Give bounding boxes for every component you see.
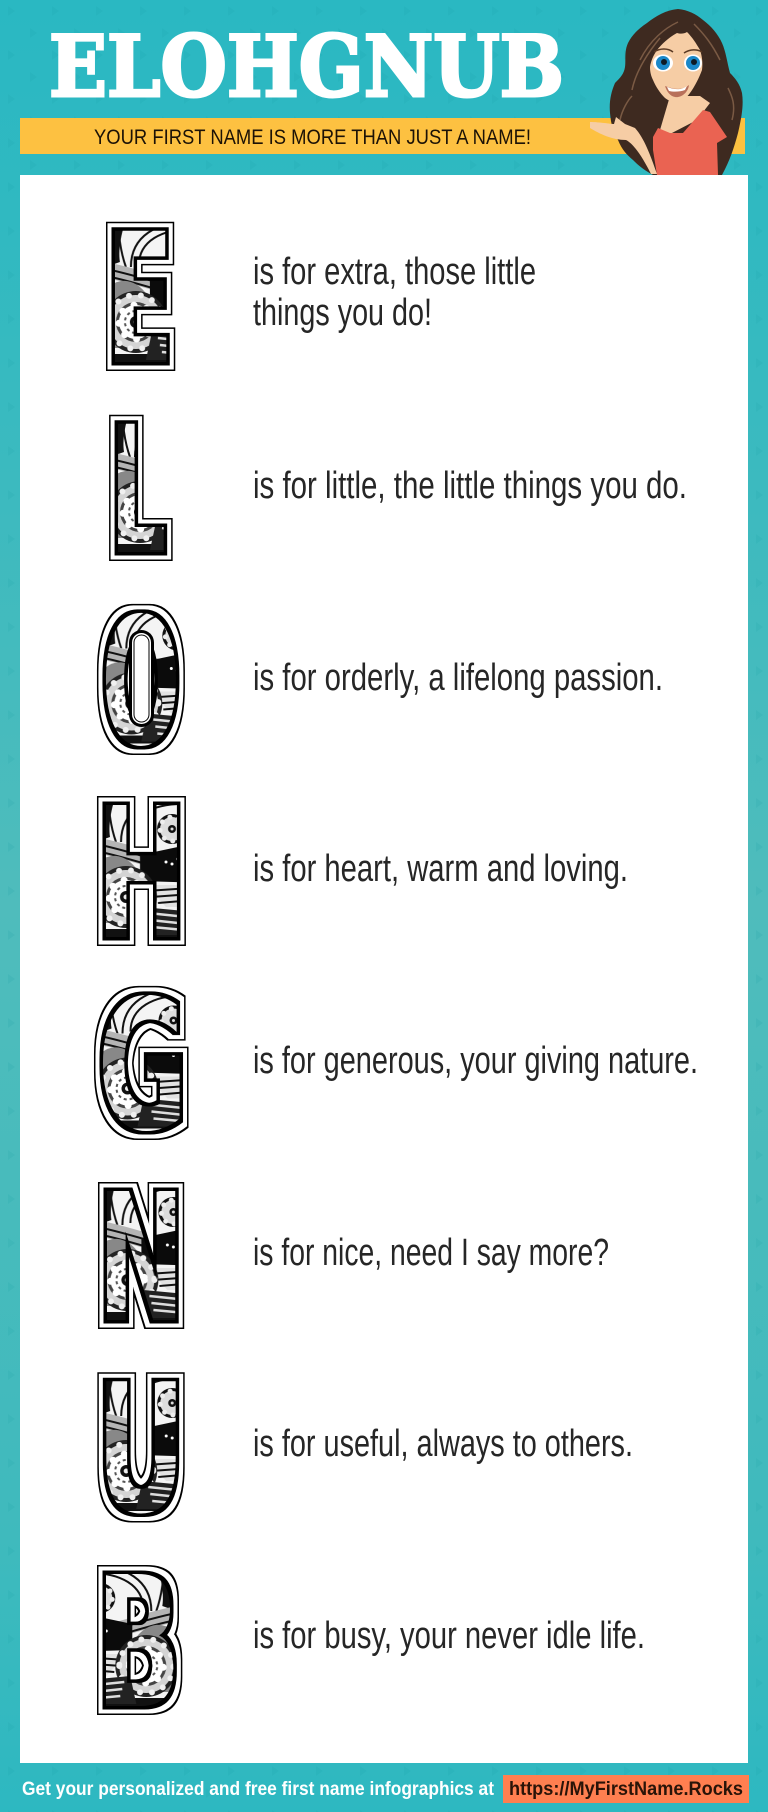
row G: letter: G: [98, 963, 188, 1172]
row B: letter: B: [96, 1538, 181, 1749]
row E: text: [253, 251, 536, 334]
subtitle: YOUR FIRST NAME IS MORE THAN JUST A NAME!: [94, 126, 531, 149]
eyes: [653, 49, 702, 72]
footer call to action: Get your personalized and free first name infographics at: [22, 1779, 495, 1800]
row H: text: is for heart, warm and loving.: [253, 848, 628, 890]
title: ELOHGNUB: [49, 17, 564, 116]
row O: letter: O: [101, 581, 181, 786]
hair: [610, 9, 743, 175]
row L: letter: L: [110, 389, 166, 594]
row B: text: is for busy, your never idle life.: [253, 1615, 645, 1657]
yellow subtitle banner: [20, 118, 745, 154]
row N: letter: N: [97, 1157, 185, 1363]
smile: [665, 85, 689, 97]
row N: text: is for nice, need I say more?: [253, 1232, 609, 1274]
neck and chest: [660, 96, 710, 134]
face: [650, 32, 702, 102]
row U: letter: U: [96, 1346, 186, 1553]
row E: letter: E: [106, 196, 174, 405]
footer link badge: https://MyFirstName.Rocks: [509, 1779, 743, 1800]
illustration: smiling woman: [590, 9, 743, 175]
arm and hand: [590, 117, 657, 174]
row E: text: things you do!: [253, 292, 432, 334]
row U: text: is for useful, always to others.: [253, 1423, 633, 1465]
row E: text: is for extra, those little: [253, 251, 536, 293]
red shirt: [653, 110, 727, 175]
row H: letter: H: [96, 770, 187, 981]
